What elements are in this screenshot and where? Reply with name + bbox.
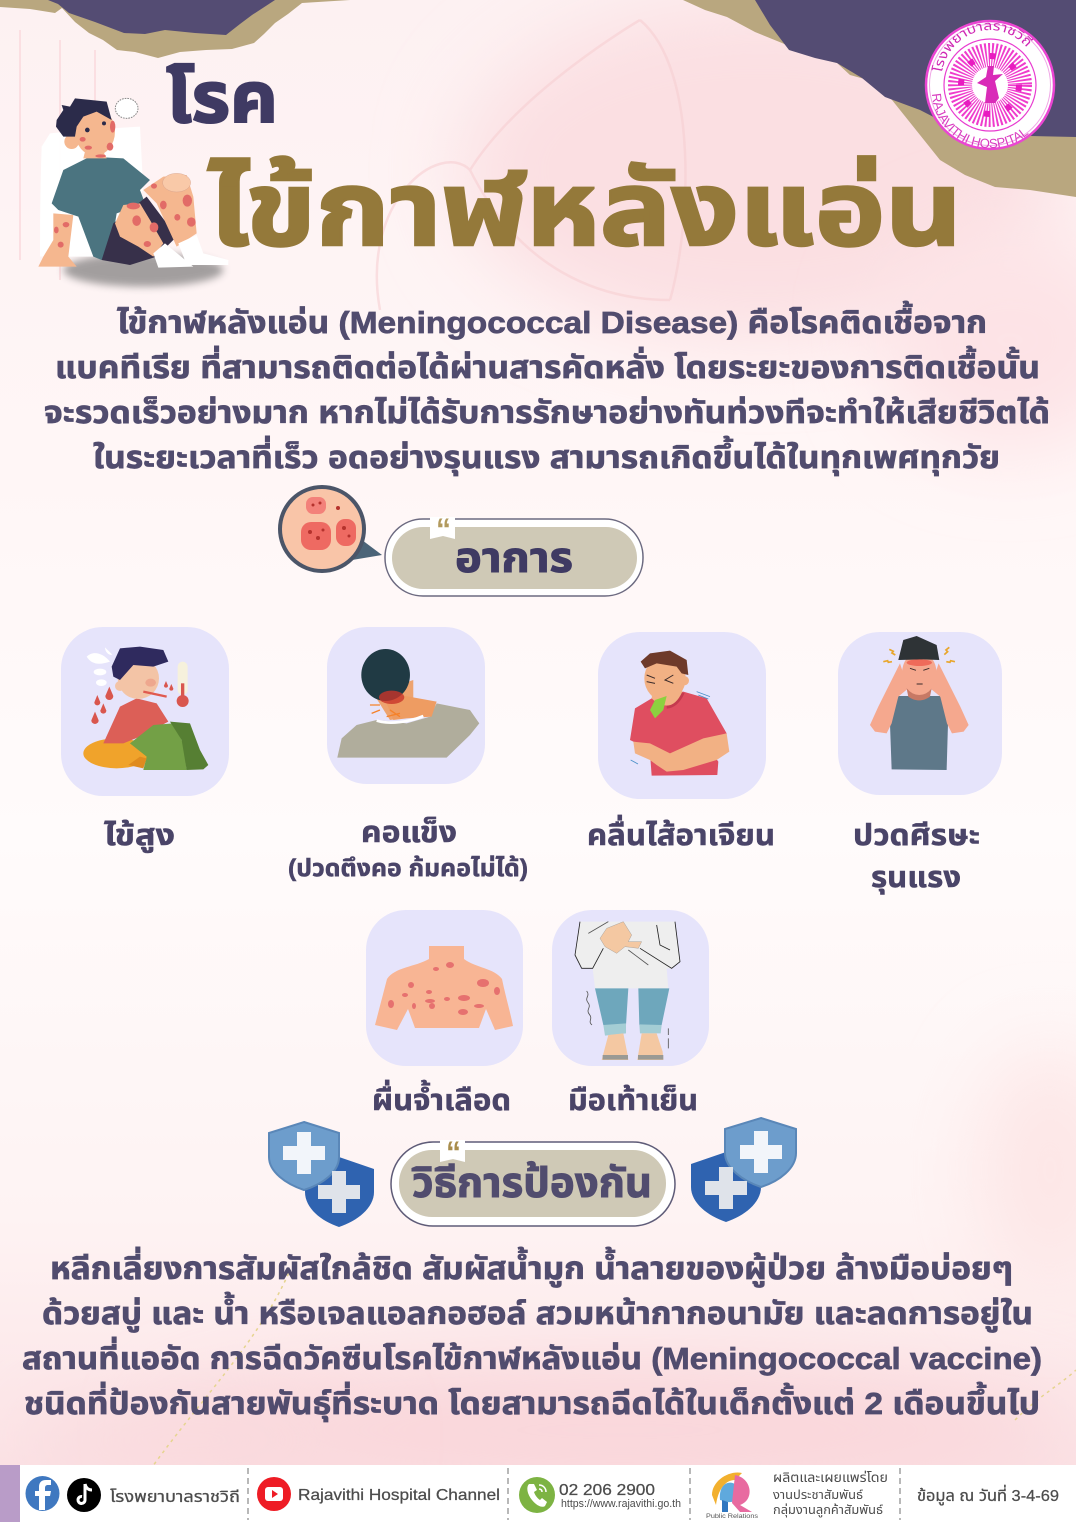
card: fever [61, 627, 229, 796]
heading: symptoms: “ [436, 513, 451, 546]
label: headache [853, 820, 980, 894]
label: nausea: คลื่นไส้อาเจียน [587, 814, 775, 852]
card: cold hands and feet [552, 910, 709, 1066]
icon: youtube [257, 1477, 291, 1511]
icon: phone [519, 1477, 555, 1513]
title small: โรค [166, 59, 278, 137]
prevention text [22, 1246, 1042, 1422]
prevention text: ด้วยสบู่ และ น้ำ หรือเจลแอลกอฮอล์ สวมหน้ากากอนามัย และลดการอยู่ใน [42, 1291, 1033, 1332]
prevention text: สถานที่แออัด การฉีดวัคซีนโรคไข้กาฬหลังแอ่น (Meningococcal vaccine) [22, 1336, 1042, 1376]
intro text: ไข้กาฬหลังแอ่น (Meningococcal Disease) คือโรคติดเชื้อจาก [117, 300, 987, 340]
intro text [44, 300, 1050, 476]
card: rash [366, 910, 523, 1066]
label: rash: ผื่นจ้ำเลือด [372, 1079, 511, 1117]
icon: public relations logo: Public Relations [706, 1514, 758, 1520]
icon: skin rash bubble [280, 487, 382, 571]
label: stiff neck: คอแข็ง [361, 817, 457, 849]
prevention text: ชนิดที่ป้องกันสายพันธุ์ที่ระบาด โดยสามารถฉีดได้ในเด็กตั้งแต่ 2 เดือนขึ้นไป [24, 1381, 1040, 1422]
heading: symptoms [385, 513, 643, 596]
label: headache: รุนแรง [871, 862, 961, 894]
hospital logo: RAJAVITHI HOSPITAL [932, 94, 1029, 148]
card: nausea [598, 632, 766, 799]
label: stiff neck: (ปวดตึงคอ ก้มคอไม่ได้) [288, 854, 528, 882]
intro text: จะรวดเร็วอย่างมาก หากไม่ได้รับการรักษาอย่างทันท่วงทีจะทำให้เสียชีวิตได้ [44, 395, 1050, 430]
footer: กลุ่มงานลูกค้าสัมพันธ์ [773, 1503, 883, 1517]
label: headache: ปวดศีรษะ [853, 820, 980, 852]
icon: tiktok [67, 1478, 101, 1512]
torn paper top right [683, 0, 1076, 197]
footer: งานประชาสัมพันธ์ [773, 1488, 863, 1502]
intro text: ในระยะเวลาที่เร็ว อดอย่างรุนแรง สามารถเกิดขึ้นได้ในทุกเพศทุกวัย [93, 435, 1000, 476]
label: cold hands and feet: มือเท้าเย็น [568, 1085, 698, 1117]
heading: prevention: วิธีการป้องกัน [412, 1159, 652, 1206]
prevention text: หลีกเลี่ยงการสัมผัสใกล้ชิด สัมผัสน้ำมูก น้ำลายของผู้ป่วย ล้างมือบ่อยๆ [50, 1246, 1013, 1287]
icon: shields right [691, 1118, 796, 1222]
card: headache [838, 632, 1002, 795]
footer: ผลิตและเผยแพร่โดย [773, 1470, 888, 1485]
footer: https://www.rajavithi.go.th [561, 1498, 681, 1510]
footer [0, 1465, 1076, 1522]
footer: ข้อมูล ณ วันที่ 3-4-69 [917, 1484, 1059, 1505]
footer: 02 206 2900 [559, 1482, 655, 1499]
footer: โรงพยาบาลราชวิถี [110, 1489, 240, 1506]
hospital logo: โรงพยาบาลราชวิถี [932, 22, 1034, 71]
illustration: sick boy [38, 98, 228, 287]
hospital logo [924, 20, 1056, 150]
intro text: แบคทีเรีย ที่สามารถติดต่อได้ผ่านสารคัดหลั่ง โดยระยะของการติดเชื้อนั้น [55, 345, 1040, 385]
label: fever: ไข้สูง [104, 820, 175, 853]
label: stiff neck [288, 817, 528, 882]
title large: ไข้กาฬหลังแอ่น [208, 152, 962, 268]
icon: public relations logo [706, 1472, 758, 1520]
heading: symptoms: อาการ [455, 534, 573, 581]
heading: prevention [391, 1136, 675, 1226]
heading: prevention: “ [446, 1136, 461, 1169]
icon: shields left [269, 1122, 374, 1227]
card: stiff neck [327, 627, 485, 784]
torn paper top left [0, 0, 350, 58]
icon: facebook [26, 1476, 60, 1511]
footer: Rajavithi Hospital Channel [298, 1487, 500, 1504]
